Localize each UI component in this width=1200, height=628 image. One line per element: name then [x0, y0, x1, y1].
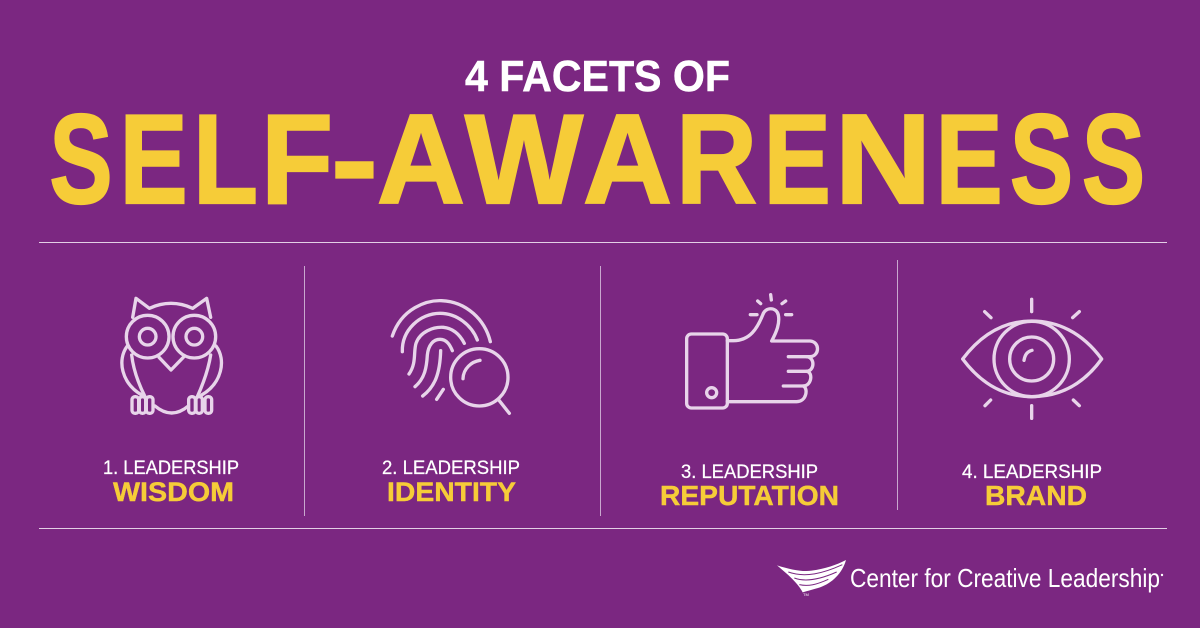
- title line 2: L: [193, 89, 258, 231]
- title line 2: S: [1082, 89, 1145, 231]
- title line 2: F: [261, 89, 333, 231]
- registered mark: [1161, 574, 1163, 576]
- label: reputation: REPUTATION: [660, 480, 839, 511]
- title line 2: S: [50, 89, 112, 231]
- label: 3. leadership: 3. LEADERSHIP: [681, 462, 818, 483]
- title line 2: E: [120, 89, 188, 231]
- title line 2: E: [936, 89, 1003, 231]
- icon: owl: [122, 298, 221, 413]
- title line 2: N: [835, 89, 932, 231]
- title line 2: A: [583, 89, 672, 231]
- title line 2: W: [465, 89, 584, 231]
- label: wisdom: WISDOM: [113, 477, 234, 507]
- trademark: TM: [803, 592, 809, 597]
- logo: Center for Creative Leadership: [777, 560, 1163, 597]
- panel: leadership wisdom: [103, 298, 239, 507]
- icon: wing mark: [777, 560, 846, 592]
- title line 2: R: [676, 89, 757, 231]
- icon: thumbs up: [687, 295, 817, 408]
- title line 1: 4 FACETS OF: [465, 52, 730, 101]
- title: [50, 52, 1145, 231]
- title line 2: -: [331, 89, 378, 231]
- label: identity: IDENTITY: [387, 477, 516, 507]
- icon: eye: [963, 299, 1102, 418]
- panel: leadership identity: [382, 301, 520, 507]
- panel: leadership brand: [962, 299, 1102, 511]
- label: 1. leadership: 1. LEADERSHIP: [103, 458, 239, 479]
- title line 2: A: [377, 89, 465, 231]
- title line 2: S: [1010, 89, 1073, 231]
- title line 2: E: [764, 89, 831, 231]
- label: brand: BRAND: [985, 480, 1087, 511]
- label: 4. leadership: 4. LEADERSHIP: [962, 462, 1102, 483]
- label: 2. leadership: 2. LEADERSHIP: [382, 458, 520, 479]
- logo wordmark: Center for Creative Leadership: [850, 563, 1160, 593]
- icon: fingerprint with magnifier: [392, 301, 509, 413]
- panel: leadership reputation: [660, 295, 839, 511]
